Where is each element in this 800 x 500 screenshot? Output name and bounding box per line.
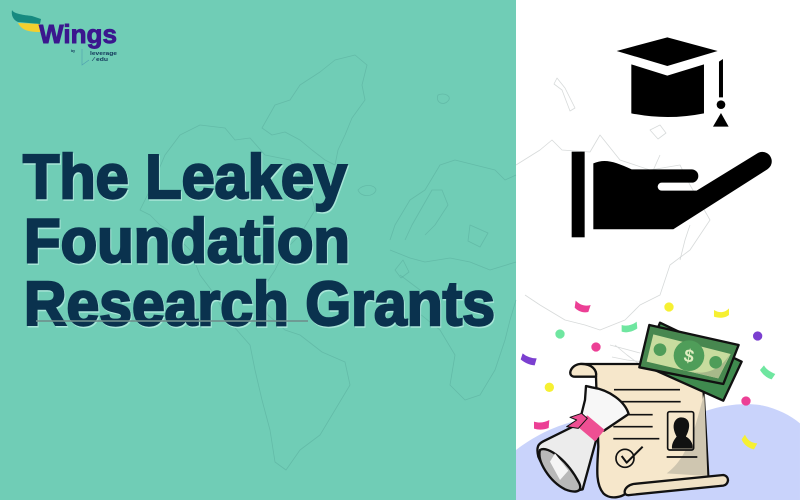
panel: white right background [516, 0, 800, 500]
logo byline: ⁄ edu [91, 57, 108, 63]
logo byline [71, 49, 117, 65]
title: Foundation [25, 208, 351, 278]
confetti [521, 301, 775, 449]
illustration: grant document, money and megaphone [516, 301, 800, 500]
logo byline: by [71, 49, 75, 53]
logo: Wings by Leverage Edu [12, 10, 117, 65]
icon: graduation cap [617, 37, 729, 127]
logo wordmark: Wings [39, 19, 117, 49]
scroll document [570, 364, 728, 497]
logo byline: leverage [90, 51, 117, 57]
dollar bills [639, 323, 742, 401]
person silhouette [672, 417, 693, 449]
icon: wing [12, 10, 41, 32]
dollar sign: $ [682, 345, 696, 367]
panel: green left background [0, 0, 516, 500]
title [23, 143, 496, 340]
world map outline: white side [516, 78, 712, 433]
world map outline: green side [140, 55, 516, 470]
icon: open hand [572, 152, 772, 237]
title: Research Grants [24, 270, 495, 339]
background hill [516, 404, 800, 500]
megaphone [537, 386, 629, 492]
title: Foundation [24, 207, 350, 276]
title: The Leakey [23, 143, 347, 212]
title: The Leakey [24, 144, 348, 214]
title: Research Grants [25, 272, 496, 340]
underline stroke behind title [36, 320, 308, 322]
